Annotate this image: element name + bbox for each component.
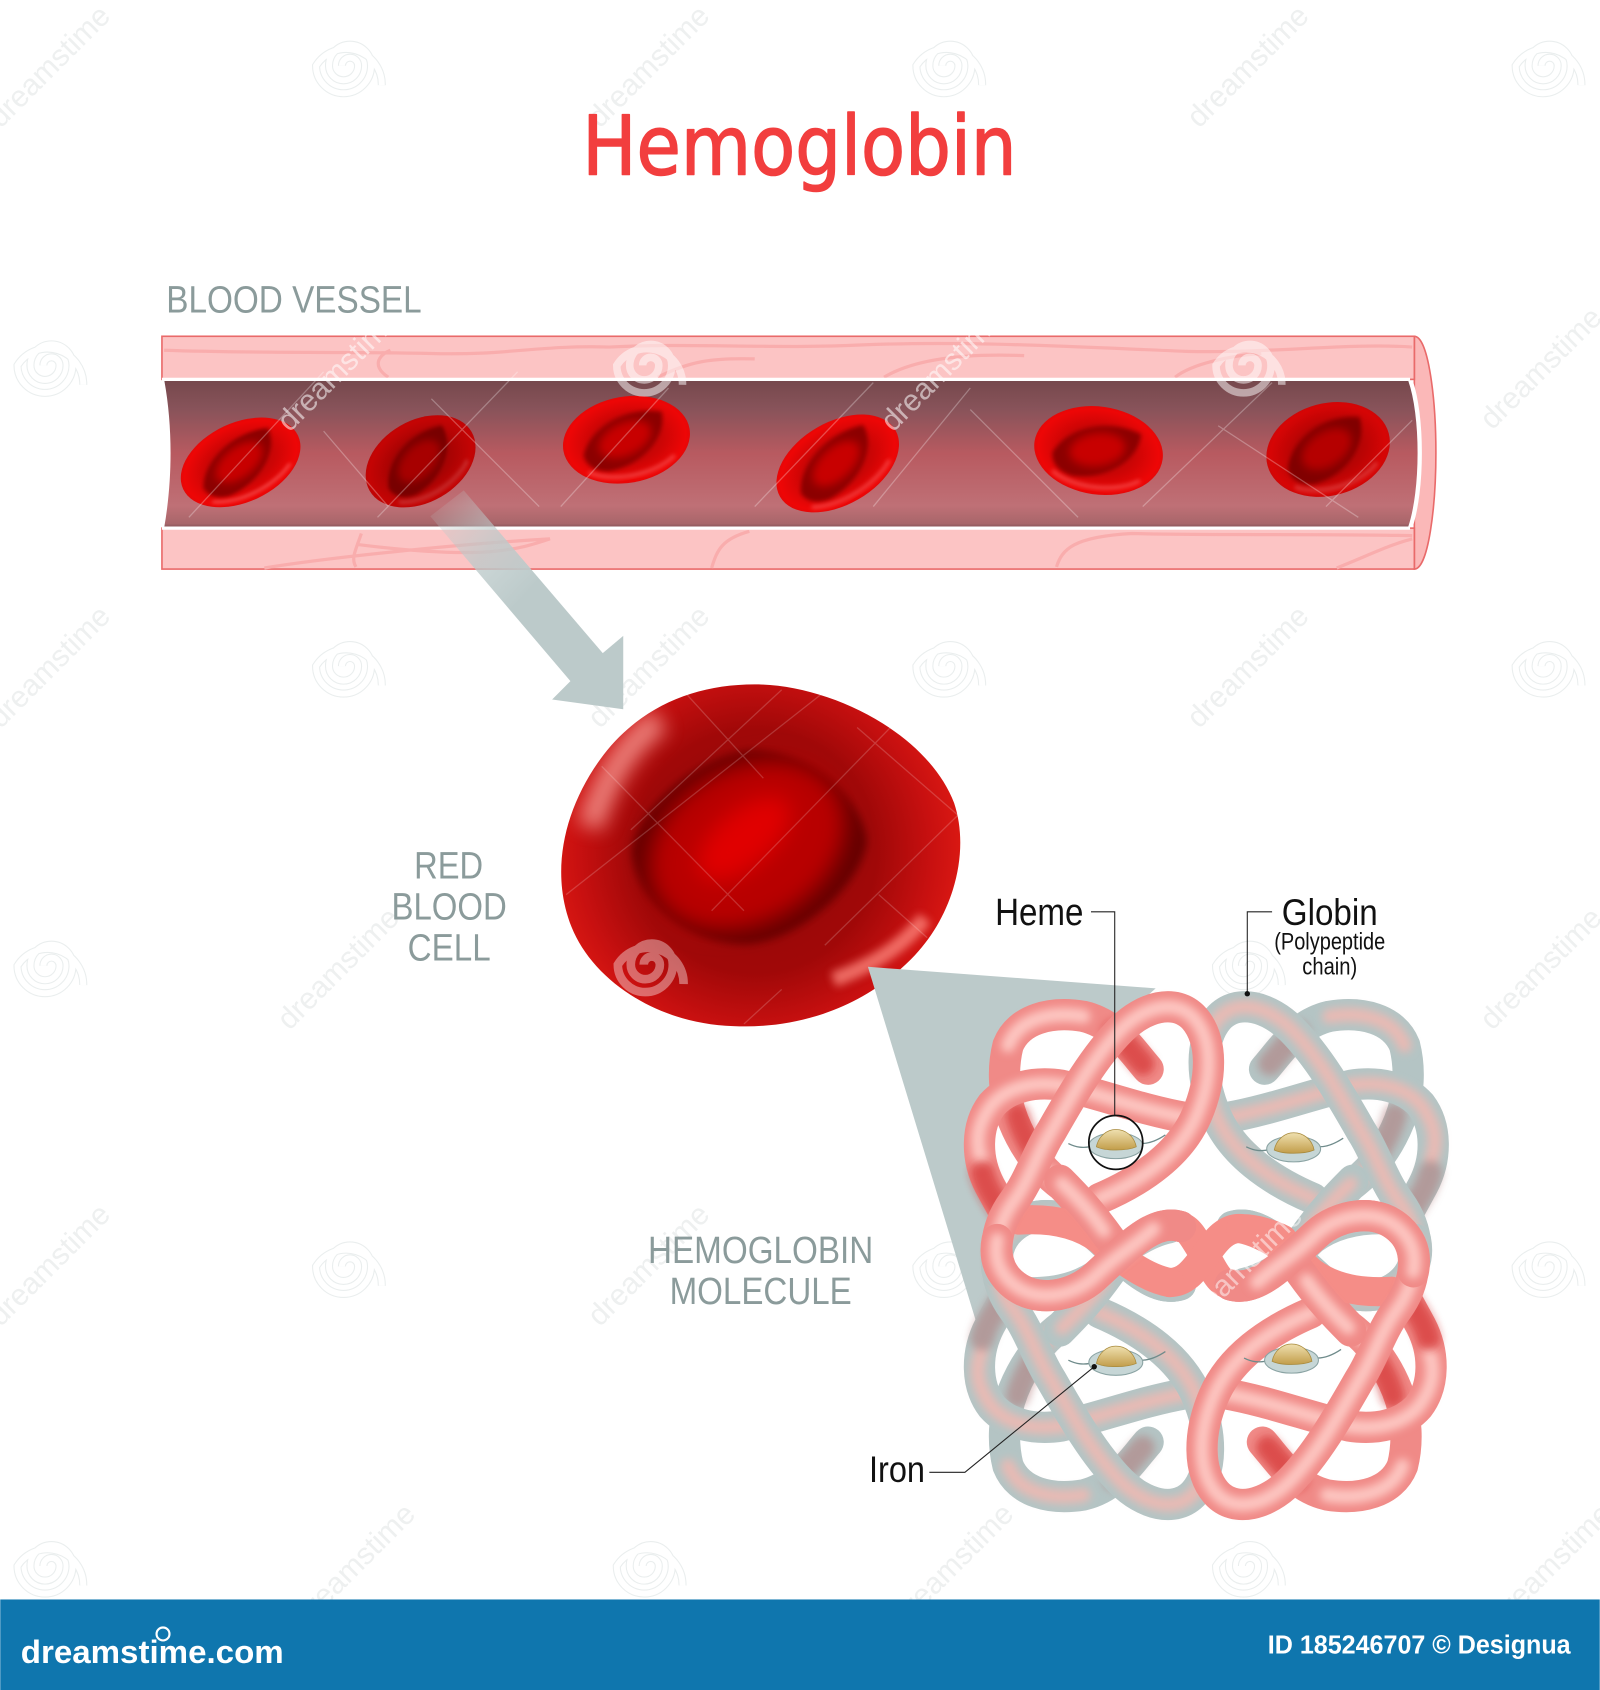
callout: globin: chain) [1302,954,1357,980]
vessel watermark overlay: dreamstime [271,303,406,438]
label: red blood cell: CELL [408,926,491,968]
cell 6 [1256,389,1401,510]
callout: heme [995,891,1143,1169]
label: blood vessel: BLOOD VESSEL [166,279,422,321]
watermark pattern: dreamstime [581,0,716,134]
hemoglobin molecule [978,1007,1435,1505]
heme group lower left [1068,1346,1165,1375]
dimple inner [619,726,876,964]
heme group upper right [1246,1133,1343,1162]
callout: heme: Heme [995,891,1083,933]
watermark pattern: dreamstime [1181,600,1315,734]
label: hemoglobin molecule: MOLECULE [670,1270,852,1312]
cell 2 [349,396,492,526]
cell watermark [618,944,684,992]
grey chain lower left [978,1216,1209,1505]
zoom wedge to molecule [868,967,1156,1336]
cell 5 [1028,398,1169,503]
vessel end cap [1414,336,1436,569]
label: red blood cell [392,844,507,968]
callout: globin [1245,892,1385,996]
label: hemoglobin molecule [648,1229,873,1312]
dimple centre [683,781,805,896]
highlight lower right [833,918,925,980]
central twist [1170,1227,1283,1285]
bottom vessel wall [162,528,1414,569]
central dimple [632,750,867,944]
watermark pattern: dreamstime [287,1497,422,1632]
highlight upper left [590,720,660,827]
cell 4 [759,394,916,533]
top vessel wall [162,336,1414,379]
cell highlights [590,720,925,980]
title: Hemoglobin [582,100,1017,195]
footer bar [0,1599,1600,1690]
heme group upper left [1068,1130,1165,1159]
callout: globin: (Polypeptide [1274,930,1385,956]
callout: iron: Iron [869,1449,925,1490]
cell body [561,684,960,1026]
red chain upper left [978,1007,1209,1296]
watermark pattern: dreamstime [885,1497,1020,1632]
vessel watermark overlay [189,303,1412,517]
label: red blood cell: BLOOD [392,885,507,927]
grey chain upper right [1204,1007,1435,1296]
molecule watermark: dreamstime [1174,1200,1309,1335]
watermark pattern: dreamstime [271,901,406,1036]
arrow to red blood cell [430,490,623,709]
vessel lumen [164,379,1419,528]
heme group lower right [1244,1344,1341,1373]
footer credit: ID 185246707 © Designua [1268,1631,1571,1659]
red blood cells in vessel [166,386,1401,533]
blood vessel [162,336,1436,569]
cell watermark lines [566,670,965,1024]
watermark pattern: dreamstime [1181,0,1315,134]
wall inner edges [162,379,1410,528]
cell 1 [166,400,315,525]
cell 3 [556,386,697,493]
watermark pattern: dreamstime [581,1198,716,1332]
label: hemoglobin molecule: HEMOGLOBIN [648,1229,873,1271]
large red blood cell [561,670,965,1026]
callout: globin: Globin [1282,892,1378,933]
footer logo: dreamstime.com [21,1634,284,1670]
lumen end rim [1410,379,1420,528]
watermark pattern: dreamstime [581,600,716,734]
label: red blood cell: RED [414,844,483,886]
callout: iron [869,1364,1097,1490]
red chain lower right [1202,1216,1433,1505]
vessel watermark overlay: dreamstime [875,303,1009,438]
